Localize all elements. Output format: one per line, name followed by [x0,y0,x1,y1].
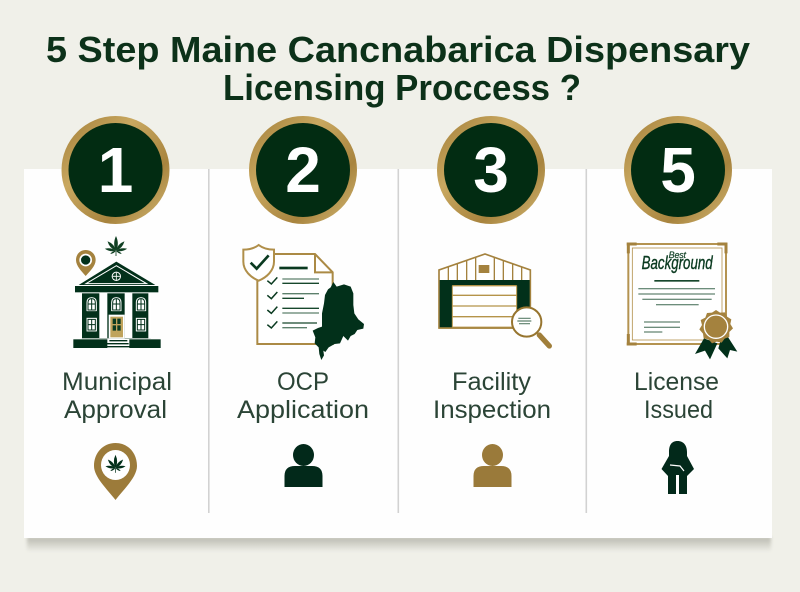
step 2 label: Application [237,396,369,424]
step 3 label: Inspection [433,396,551,424]
card shadow [27,537,771,552]
step 1 label: Approval [64,396,167,424]
icon: license certificate: Best [669,250,686,260]
step 2 number badge: 2 [285,134,321,206]
step 3 label: Facility [452,368,531,396]
step 1 number badge: 1 [98,134,133,206]
icon: application checklist with Maine map [243,245,364,360]
step 4 label: License [634,368,719,396]
step 2 number badge [249,116,357,224]
title: 5 Step Maine Cancnabarica Dispensary [46,29,750,70]
icon: municipal building [73,236,161,348]
icon: standing figure [662,441,694,494]
icon: person gold [474,444,512,487]
step 3 number badge: 3 [473,134,509,206]
step 2 label: OCP [277,368,329,396]
step 4 label: Issued [644,396,713,424]
icon: Maine silhouette [313,282,364,360]
icon: facility with magnifier [439,254,549,346]
icon: person green [284,444,322,487]
title [46,29,750,108]
icon: license certificate: Background [642,252,713,273]
step 1 label: Municipal [62,368,172,396]
icon: location pin with leaf [94,443,137,500]
step 4 number badge: 5 [660,134,696,206]
step 4 number badge [624,116,732,224]
step 3 number badge [437,116,545,224]
panel: steps card [24,169,772,538]
title: Licensing Proccess ? [223,67,581,108]
step 1 number badge [62,116,170,224]
icon: license certificate [627,243,737,359]
